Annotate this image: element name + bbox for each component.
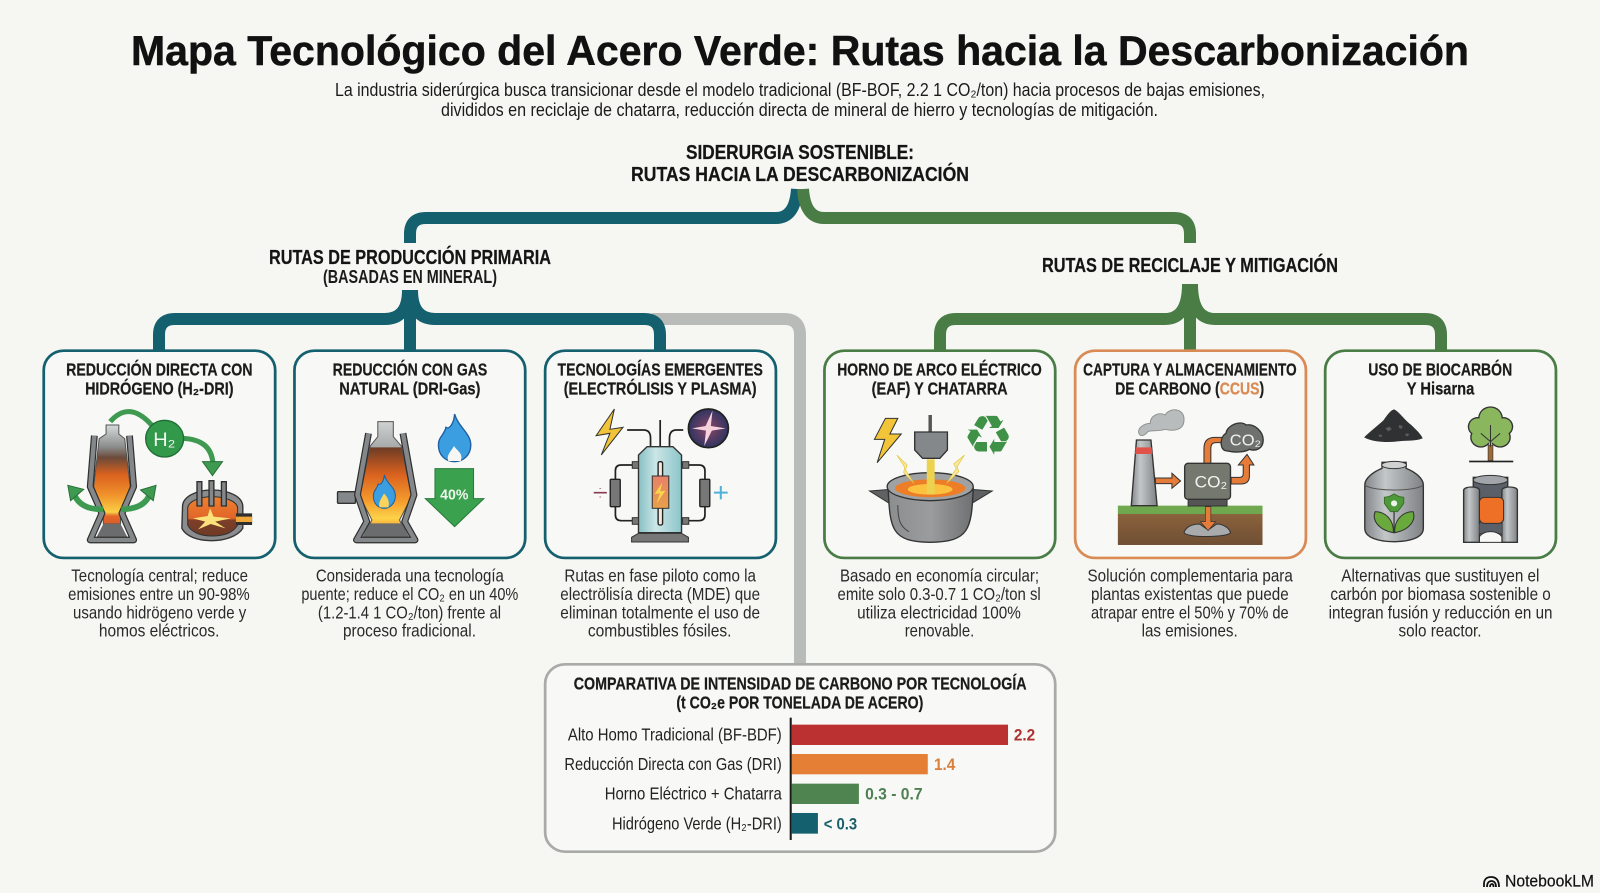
chart heading: (t CO₂e POR TONELADA DE ACERO) (676, 693, 923, 712)
card heading (558, 359, 763, 398)
heading: primary routes: RUTAS DE PRODUCCIÓN PRIMARIA (269, 245, 551, 269)
card description: (1.2-1.4 1 CO₂/ton) frente al (318, 603, 501, 622)
connector: root to recycling routes (803, 189, 1190, 243)
connector: recycling routes to cards (940, 284, 1441, 352)
heading: recycling routes: RUTAS DE RECICLAJE Y MITIGACIÓN (1042, 253, 1338, 277)
panel: natural gas reduction (294, 351, 525, 641)
card heading: (ELECTRÓLISIS Y PLASMA) (564, 378, 757, 398)
connector: primary routes to cards (159, 290, 660, 352)
intro text: divididos en reciclaje de chatarra, reducción directa de mineral de hierro y tecnologías de mitigación. (441, 100, 1158, 120)
card frame (824, 351, 1055, 558)
card description: puente; reduce el CO₂ en un 40% (301, 584, 519, 604)
card description: Tecnología central; reduce (71, 566, 248, 586)
card heading: HIDRÓGENO (H₂-DRI) (85, 378, 234, 398)
card frame (1325, 351, 1556, 558)
heading: primary routes (269, 245, 551, 287)
card description (68, 566, 250, 641)
card heading: REDUCCIÓN DIRECTA CON (66, 359, 252, 380)
icon: arc furnace and recycling (870, 404, 1014, 542)
panel: carbon capture and storage (1075, 351, 1306, 641)
card description: carbón por biomasa sostenible o (1330, 584, 1551, 604)
bar: green hydrogen: < 0.3 (824, 815, 857, 833)
root heading (631, 142, 969, 186)
card heading: TECNOLOGÍAS EMERGENTES (558, 359, 763, 380)
card description: electrölisía directa (MDE) que (560, 584, 760, 604)
icon: electrolysis cell and plasma (594, 409, 728, 542)
connector: root to primary routes (410, 189, 797, 243)
card description: Basado en economía circular; (840, 566, 1039, 586)
icon: gas furnace with flame (338, 414, 484, 540)
card description (838, 566, 1041, 641)
card description: las emisiones. (1142, 621, 1238, 641)
bar: traditional blast furnace: Alto Homo Tradicional (BF-BDF) (568, 725, 782, 745)
card heading (837, 359, 1042, 398)
intro text (335, 80, 1265, 120)
card description: Solución complementaria para (1088, 566, 1293, 586)
icon: biochar, tree, bio tank and reactor (1364, 406, 1517, 542)
card frame (545, 351, 776, 558)
root heading: RUTAS HACIA LA DESCARBONIZACIÓN (631, 162, 969, 186)
bar: direct reduction with gas: Reducción Directa con Gas (DRI) (564, 754, 782, 774)
chart frame (545, 664, 1055, 852)
bar: direct reduction with gas: 1.4 (934, 755, 956, 774)
card frame (294, 351, 525, 558)
panel: carbon intensity comparison (545, 664, 1055, 852)
card description (1088, 566, 1293, 641)
card description: eliminan totalmente el uso de (560, 603, 760, 622)
heading: primary routes: (BASADAS EN MINERAL) (323, 267, 497, 287)
card description: Alternativas que sustituyen el (1341, 566, 1539, 586)
card heading: USO DE BIOCARBÓN (1368, 359, 1512, 380)
card description: utiliza electricidad 100% (857, 603, 1021, 622)
card description: Rutas en fase piloto como la (564, 566, 756, 586)
card heading: CAPTURA Y ALMACENAMIENTO (1083, 360, 1297, 380)
icon: NotebookLM logo (1484, 877, 1499, 887)
icon: blast furnace with hydrogen (68, 412, 252, 541)
icon: gas furnace with flame: 40% (440, 488, 468, 503)
card description: combustibles fósiles. (588, 621, 731, 641)
card description: solo reactor. (1399, 621, 1482, 641)
card description: emite solo 0.3-0.7 1 CO₂/ton sl (838, 584, 1041, 604)
card heading: REDUCCIÓN CON GAS (333, 359, 487, 380)
panel: biochar and Hisarna (1325, 351, 1556, 641)
card frame (44, 351, 275, 558)
card heading: DE CARBONO (CCUS) (1115, 379, 1264, 398)
card description (301, 566, 519, 641)
bar: direct reduction with gas (564, 754, 956, 774)
bar: electric furnace and scrap (605, 784, 923, 804)
bar: traditional blast furnace (568, 725, 1035, 745)
intro text: La industria siderúrgica busca transicionar desde el modelo tradicional (BF-BOF, 2.2 1 CO₂/ton) hacia procesos de bajas emisiones, (335, 80, 1265, 100)
icon: carbon capture plant (1118, 410, 1263, 545)
card description: atrapar entre el 50% y 70% de (1091, 603, 1289, 622)
icon: carbon capture plant: CO₂ (1195, 473, 1227, 492)
title: Mapa Tecnológico del Acero Verde: Rutas hacia la Descarbonización (131, 27, 1469, 74)
card heading: HORNO DE ARCO ELÉCTRICO (837, 359, 1042, 380)
watermark: NotebookLM: NotebookLM (1505, 872, 1594, 891)
card description (560, 566, 760, 641)
card heading: Y Hisarna (1407, 379, 1475, 398)
card description: homos eléctricos. (99, 621, 219, 641)
card description: usando hidrögeno verde y (73, 603, 246, 622)
card heading: (EAF) Y CHATARRA (872, 379, 1008, 398)
chart heading: COMPARATIVA DE INTENSIDAD DE CARBONO POR TECNOLOGÍA (574, 673, 1027, 693)
icon: blast furnace with hydrogen: H₂ (153, 429, 175, 451)
panel: hydrogen direct reduction (44, 351, 275, 641)
panel: electric arc furnace (824, 351, 1055, 641)
card heading (1083, 360, 1297, 398)
chart axis (790, 718, 792, 840)
card description: integran fusión y reducción en un (1329, 603, 1552, 622)
card heading (333, 359, 487, 398)
card description: renovable. (905, 621, 974, 641)
bar: electric furnace and scrap: 0.3 - 0.7 (865, 785, 923, 804)
icon: arc furnace and recycling: ♻ (963, 404, 1014, 468)
card description: emisiones entre un 90-98% (68, 584, 250, 604)
bar: green hydrogen: Hidrógeno Verde (H₂-DRI) (612, 814, 782, 833)
card heading (66, 359, 252, 398)
card description: plantas existentas que puede (1091, 584, 1289, 604)
icon: carbon capture plant: CO₂ (1230, 432, 1261, 449)
card heading (1368, 359, 1512, 398)
card description: proceso fradicional. (343, 621, 476, 641)
bar chart (564, 718, 1035, 840)
bar: electric furnace and scrap: Horno Eléctrico + Chatarra (605, 784, 782, 804)
card frame (1075, 351, 1306, 558)
card description (1329, 566, 1552, 641)
connector: to comparison chart (652, 319, 800, 665)
bar: traditional blast furnace: 2.2 (1014, 726, 1035, 745)
chart heading (574, 673, 1027, 712)
root heading: SIDERURGIA SOSTENIBLE: (686, 142, 914, 164)
card description: Considerada una tecnología (316, 566, 504, 586)
card heading: NATURAL (DRI-Gas) (339, 379, 480, 398)
panel: emerging technologies (545, 351, 776, 641)
